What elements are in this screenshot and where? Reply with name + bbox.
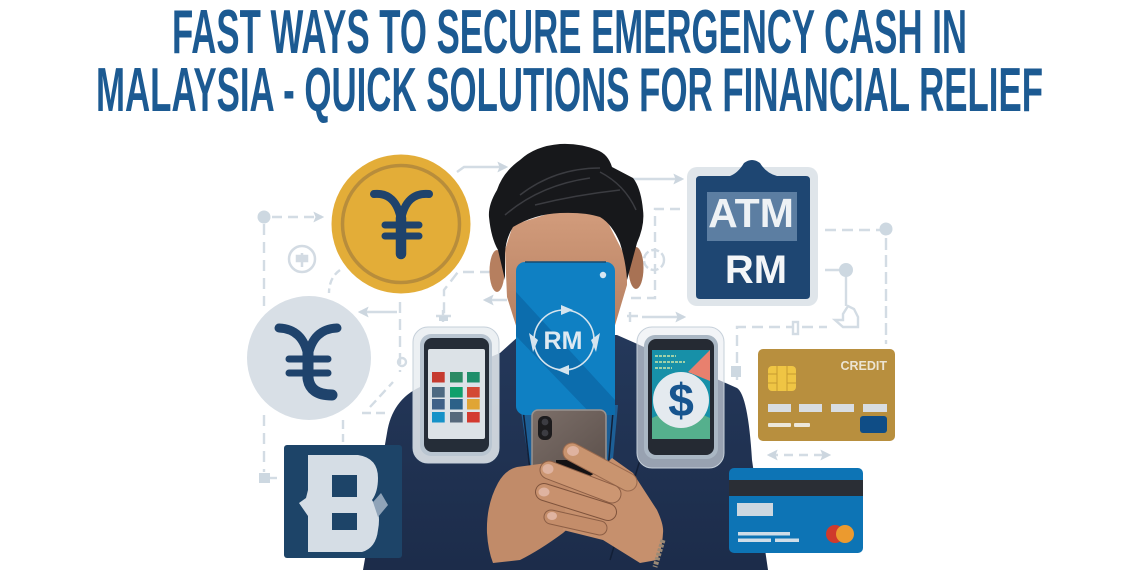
gold credit card: CREDIT bbox=[840, 359, 887, 373]
app phone bbox=[413, 327, 499, 463]
blue bank card bbox=[729, 468, 863, 553]
icon: gold yen coin bbox=[332, 154, 470, 294]
gold credit card bbox=[758, 349, 895, 441]
app icon grid bbox=[432, 372, 480, 422]
title bbox=[96, 0, 1043, 125]
blue RM phone: RM bbox=[544, 327, 582, 355]
watch bracelet bbox=[655, 540, 663, 567]
person bbox=[363, 144, 768, 570]
fingernails bbox=[538, 446, 579, 520]
icon: grey yen coin bbox=[247, 296, 371, 420]
left hand bbox=[487, 463, 572, 563]
face bbox=[505, 210, 627, 332]
ATM sign bbox=[687, 160, 818, 306]
blue RM phone bbox=[516, 262, 615, 415]
lapels bbox=[522, 400, 640, 560]
hands bbox=[487, 446, 663, 567]
hair bbox=[489, 144, 643, 280]
suit jacket bbox=[363, 335, 768, 570]
dollar phone: $ bbox=[668, 374, 694, 426]
ATM sign: RM bbox=[725, 248, 787, 292]
ATM sign: ATM bbox=[708, 190, 794, 236]
connector network bbox=[264, 167, 886, 478]
fingers bbox=[544, 452, 628, 528]
ears bbox=[490, 250, 504, 292]
dollar phone bbox=[637, 327, 724, 468]
connector nodes bbox=[258, 210, 892, 483]
smartphone held in hands bbox=[532, 410, 606, 476]
icon: plug circle bbox=[289, 246, 315, 272]
screen caption bbox=[655, 356, 685, 368]
icon: B tile bbox=[284, 445, 402, 558]
hair highlights bbox=[505, 168, 636, 215]
shirt bbox=[520, 405, 618, 470]
right hand bbox=[563, 458, 663, 563]
